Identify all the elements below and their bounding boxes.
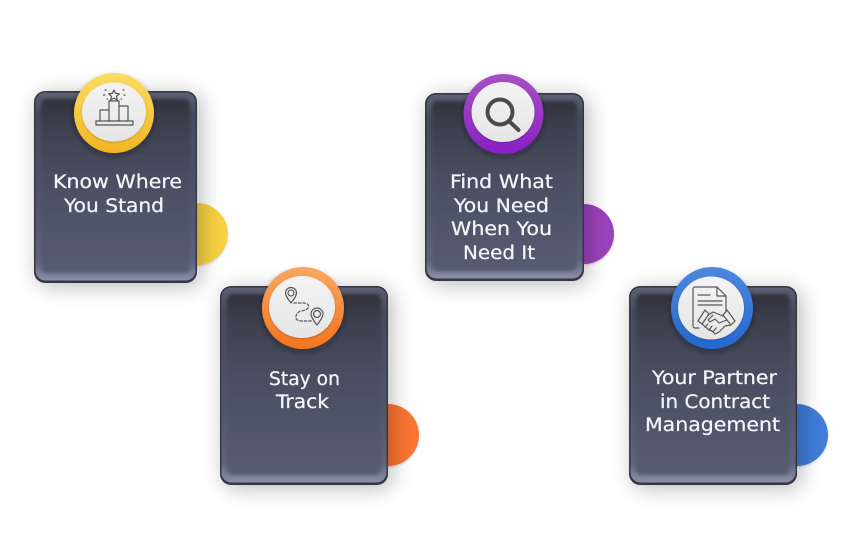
side tab: blue: [797, 404, 828, 466]
text: Your Partner in Contract Management: in Contract: [660, 392, 770, 413]
text: Know Where You Stand: You Stand: [63, 196, 164, 217]
text: Stay on Track: [269, 369, 340, 413]
badge: white cap: [82, 82, 146, 142]
text: Stay on Track: Stay on: [269, 369, 340, 390]
card: Know Where You Stand: [34, 73, 228, 283]
text: Find What You Need When You Need It: [450, 172, 553, 264]
text: Find What You Need When You Need It: Find What: [450, 172, 553, 193]
card: Stay on Track: [220, 267, 419, 485]
badge: blue ring: [671, 267, 753, 349]
text: Find What You Need When You Need It: Need It: [463, 243, 535, 264]
text: Your Partner in Contract Management: [645, 368, 780, 436]
text: Know Where You Stand: Know Where: [53, 172, 182, 193]
badge: white cap: [678, 276, 744, 340]
text: Your Partner in Contract Management: Your Partner: [651, 368, 777, 389]
badge: orange ring: [262, 267, 344, 349]
side tab: orange: [388, 404, 419, 466]
badge: purple ring: [464, 74, 544, 154]
text: Find What You Need When You Need It: When You: [451, 219, 552, 240]
icon: magnifying glass: [488, 100, 518, 130]
text: Know Where You Stand: [53, 172, 182, 217]
tray panel: [425, 93, 584, 281]
tray panel: [34, 91, 197, 283]
text: Stay on Track: Track: [275, 392, 329, 413]
text: Your Partner in Contract Management: Management: [645, 415, 780, 436]
tray panel: [629, 286, 797, 485]
icon: contract document and handshake: [693, 287, 735, 334]
icon: podium with star: [96, 90, 133, 125]
icon: route between two map pins: [286, 288, 323, 325]
text: Find What You Need When You Need It: You Need: [453, 196, 549, 217]
badge: white cap: [472, 82, 534, 142]
card: Find What You Need When You Need It: [425, 74, 614, 281]
tray panel: [220, 286, 388, 485]
side tab: purple: [584, 204, 614, 264]
badge: yellow ring: [74, 73, 154, 153]
side tab: yellow: [197, 203, 228, 265]
card: Your Partner in Contract Management: [629, 267, 828, 485]
badge: white cap: [269, 276, 335, 338]
